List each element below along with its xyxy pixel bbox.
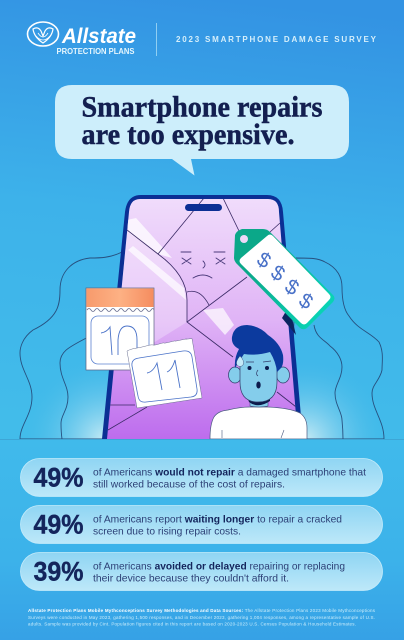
stat 2: screen due to rising repair costs. (93, 526, 241, 538)
stat 1: still worked because of the cost of repairs. (93, 480, 285, 490)
stat 3 (20, 552, 382, 590)
stat 2: of Americans report waiting longer to repair a cracked (93, 514, 342, 526)
stat 2: 49% (34, 510, 84, 540)
wavy shape inner right (314, 325, 343, 439)
wavy shape inner left (60, 336, 90, 439)
head (240, 348, 277, 402)
smartphone (102, 195, 303, 439)
person with worried expression (210, 325, 307, 439)
dollar signs: $ (295, 289, 317, 314)
hair (232, 325, 283, 372)
screen highlights (122, 231, 186, 342)
wavy shape right (290, 258, 384, 439)
background (0, 0, 404, 440)
speech bubble heading (55, 85, 349, 176)
methodology footnote: Surveys were conducted in May 2023, gathering 1,500 responses, and in December 2023, gathering 1,004 responses, among a representative sample of U.S. (28, 615, 375, 620)
stat 1 (20, 458, 382, 496)
screen cracks (108, 198, 300, 430)
dollar signs: $ (267, 261, 289, 286)
methodology footnote: adults. Sample was provided by Cint. Population figures cited in this report are based on 2020-2023 U.S. Census Population & Household Estimates. (28, 622, 356, 626)
torso (210, 407, 307, 439)
calendar page 11 (127, 338, 202, 408)
bottom stats panel (0, 439, 404, 640)
stat 2 (20, 506, 382, 544)
sad face on screen (181, 252, 225, 278)
wavy shape left (20, 252, 122, 439)
survey label: 2023 SMARTPHONE DAMAGE SURVEY (176, 35, 377, 44)
methodology footnote (28, 608, 376, 626)
price tag (234, 229, 334, 335)
notch (185, 204, 222, 211)
dollar signs (253, 248, 317, 314)
calendar page 10 (86, 288, 154, 370)
speech bubble heading: Smartphone repairs (82, 90, 322, 124)
ears (228, 367, 242, 383)
neck (250, 398, 268, 407)
stat 1: of Americans would not repair a damaged smartphone that (93, 468, 366, 478)
stat 3: 39% (34, 556, 84, 586)
methodology footnote: Allstate Protection Plans Mobile Mythconceptions Survey Methodologies and Data Sources: The Allstate Protection Plans 2023 Mobile Mythconceptions (28, 608, 376, 613)
facial features (248, 366, 252, 370)
logo: Allstate Protection Plans: PROTECTION PLANS (56, 47, 134, 56)
stat 3: their device because they couldn't afford it. (93, 574, 289, 584)
logo: Allstate Protection Plans: Allstate (61, 24, 136, 48)
stat 3: of Americans avoided or delayed repairing or replacing (93, 562, 345, 572)
sweat drop (236, 356, 244, 366)
dollar signs: $ (281, 275, 303, 300)
logo: Allstate Protection Plans (28, 22, 136, 56)
stat 1: 49% (34, 462, 84, 492)
speech bubble heading: are too expensive. (82, 118, 294, 151)
dollar signs: $ (253, 248, 275, 273)
